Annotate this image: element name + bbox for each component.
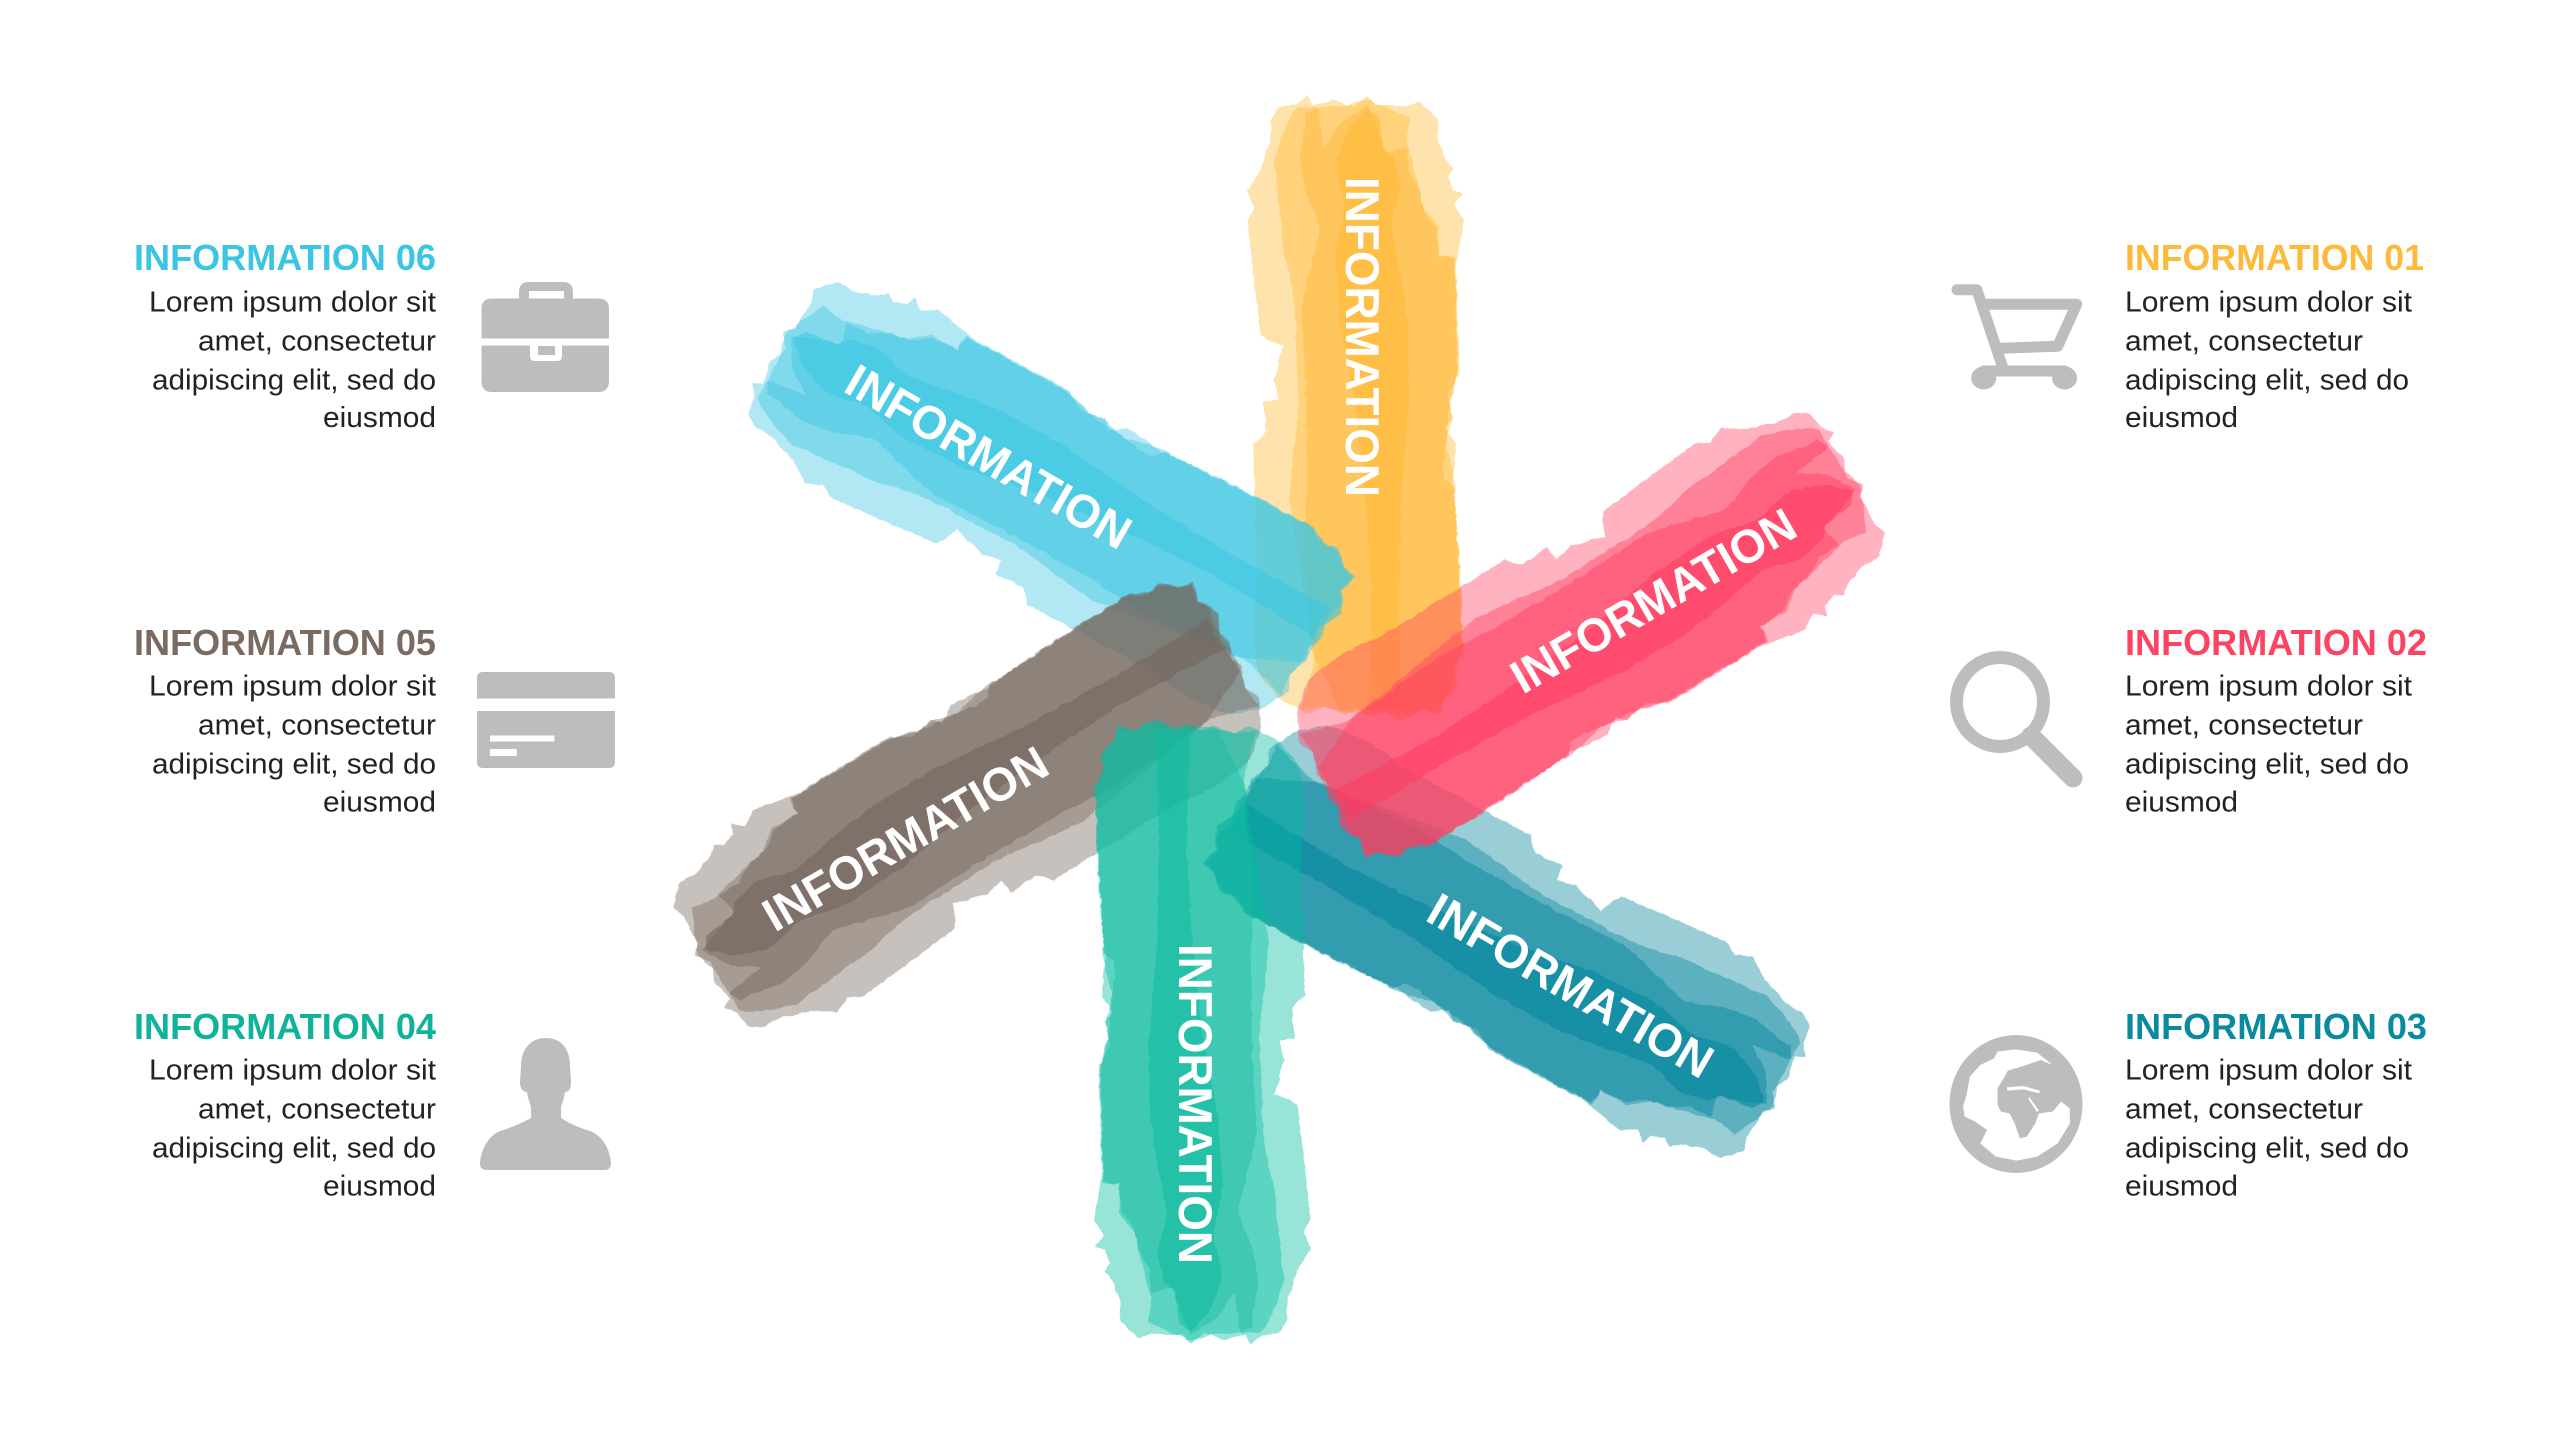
- text block 06: Lorem ipsum dolor sit: [149, 286, 436, 318]
- brush star chart: [647, 96, 1911, 1344]
- arm: blue: [723, 249, 1373, 749]
- arm: teal: INFORMATION: [1419, 882, 1723, 1088]
- arm: brown: INFORMATION: [753, 735, 1057, 941]
- arm: pink: [1262, 380, 1911, 880]
- arm: green: INFORMATION: [1169, 944, 1222, 1264]
- icon: magnifier: [1956, 658, 2073, 778]
- panel: information 04: [134, 1006, 437, 1202]
- panel: information 02: [2125, 622, 2427, 818]
- text block 02: eiusmod: [2125, 786, 2238, 818]
- heading 01: INFORMATION 01: [2125, 237, 2424, 278]
- text block 02: Lorem ipsum dolor sit: [2125, 670, 2412, 702]
- heading 05: INFORMATION 05: [134, 622, 436, 663]
- text block 02: amet, consectetur: [2125, 710, 2363, 742]
- text block 01: Lorem ipsum dolor sit: [2125, 286, 2412, 318]
- text block 06: amet, consectetur: [198, 326, 436, 358]
- text block 04: amet, consectetur: [198, 1094, 436, 1126]
- icon: person: [480, 1038, 611, 1170]
- icon: briefcase: [482, 282, 609, 392]
- icon: globe: [1950, 1035, 2082, 1173]
- icon: shopping cart: [1957, 290, 2077, 384]
- text block 01: eiusmod: [2125, 402, 2238, 434]
- text block 05: Lorem ipsum dolor sit: [149, 670, 436, 702]
- panel: information 03: [2125, 1006, 2427, 1202]
- arm: yellow: [1247, 96, 1463, 722]
- text block 05: amet, consectetur: [198, 710, 436, 742]
- text block 03: amet, consectetur: [2125, 1094, 2363, 1126]
- text block 03: Lorem ipsum dolor sit: [2125, 1054, 2412, 1086]
- text block 06: eiusmod: [323, 402, 436, 434]
- arm: teal: [1185, 691, 1835, 1191]
- text block 03: adipiscing elit, sed do: [2125, 1132, 2409, 1164]
- text block 03: eiusmod: [2125, 1170, 2238, 1202]
- text block 04: eiusmod: [323, 1170, 436, 1202]
- panel: information 06: [134, 237, 436, 434]
- icon: credit card: [477, 672, 615, 768]
- heading 02: INFORMATION 02: [2125, 622, 2427, 663]
- panel: information 01: [2125, 237, 2424, 434]
- arm: pink: INFORMATION: [1501, 497, 1805, 703]
- panel: information 05: [134, 622, 436, 818]
- heading 06: INFORMATION 06: [134, 237, 436, 278]
- text block 02: adipiscing elit, sed do: [2125, 748, 2409, 780]
- heading 03: INFORMATION 03: [2125, 1006, 2427, 1047]
- arm: yellow: INFORMATION: [1336, 177, 1389, 497]
- text block 04: Lorem ipsum dolor sit: [149, 1054, 436, 1086]
- heading 04: INFORMATION 04: [134, 1006, 437, 1047]
- arm: blue: INFORMATION: [837, 353, 1141, 559]
- text block 06: adipiscing elit, sed do: [152, 364, 436, 396]
- arm: brown: [647, 560, 1296, 1060]
- arm: green: [1095, 718, 1311, 1344]
- text block 01: amet, consectetur: [2125, 326, 2363, 358]
- text block 05: eiusmod: [323, 786, 436, 818]
- text block 04: adipiscing elit, sed do: [152, 1132, 436, 1164]
- text block 01: adipiscing elit, sed do: [2125, 364, 2409, 396]
- text block 05: adipiscing elit, sed do: [152, 748, 436, 780]
